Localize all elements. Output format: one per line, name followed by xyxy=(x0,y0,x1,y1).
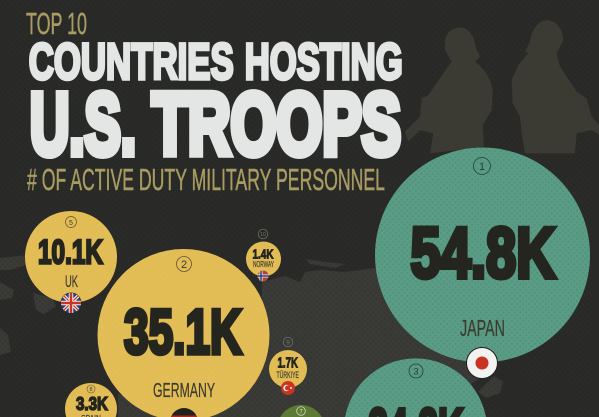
rank 1 xyxy=(474,158,490,174)
label Türkiye: TÜRKIYE xyxy=(276,370,299,380)
world map silhouette xyxy=(0,255,503,417)
title: countries hosting: COUNTRIES xyxy=(29,33,234,90)
flag: Norway xyxy=(258,270,268,282)
flag: Japan xyxy=(466,348,498,378)
rank 10: 10 xyxy=(260,232,266,238)
rank 1: 1 xyxy=(479,161,485,173)
label UK: UK xyxy=(65,273,78,291)
title: U.S. troops: TROOPS xyxy=(152,76,401,173)
flag: UK xyxy=(60,292,82,313)
value 10.1K: 10.1K xyxy=(38,234,103,272)
value 1.7K: 1.7K xyxy=(278,356,298,372)
rank 3: 3 xyxy=(413,366,419,376)
title: countries hosting: HOSTING xyxy=(245,33,403,90)
label Germany: GERMANY xyxy=(153,380,215,402)
bubble: rank 7 country xyxy=(277,405,325,417)
bubble: South Korea xyxy=(344,358,487,417)
bubble: Germany xyxy=(98,249,270,417)
flag: Türkiye xyxy=(281,381,295,395)
title: U.S. troops: U.S. xyxy=(30,76,136,173)
label Japan: JAPAN xyxy=(460,315,505,341)
title block xyxy=(26,6,403,197)
value 1.4K: 1.4K xyxy=(252,246,274,262)
title: top 10: TOP 10 xyxy=(26,6,87,41)
rank 7: 7 xyxy=(299,410,303,416)
bubble: Spain xyxy=(65,383,117,417)
rank 2: 2 xyxy=(181,259,187,271)
title: U.S. troops xyxy=(30,76,401,173)
flag: Germany xyxy=(170,408,198,417)
value 35.1K: 35.1K xyxy=(124,298,242,368)
rank 5: 5 xyxy=(69,220,73,227)
bubble: UK xyxy=(25,211,117,314)
bubble: Japan xyxy=(375,148,590,378)
soldiers silhouette xyxy=(405,20,599,153)
value 54.8K: 54.8K xyxy=(410,214,556,294)
bubble: Norway xyxy=(246,229,281,282)
rank 2 xyxy=(176,256,192,272)
rank 8: 8 xyxy=(89,387,93,393)
value 3.3K: 3.3K xyxy=(76,394,108,414)
bubble: Türkiye xyxy=(269,337,307,395)
label Norway: NORWAY xyxy=(253,260,274,269)
rank 3 xyxy=(409,364,423,378)
rank 9: 9 xyxy=(286,340,290,346)
